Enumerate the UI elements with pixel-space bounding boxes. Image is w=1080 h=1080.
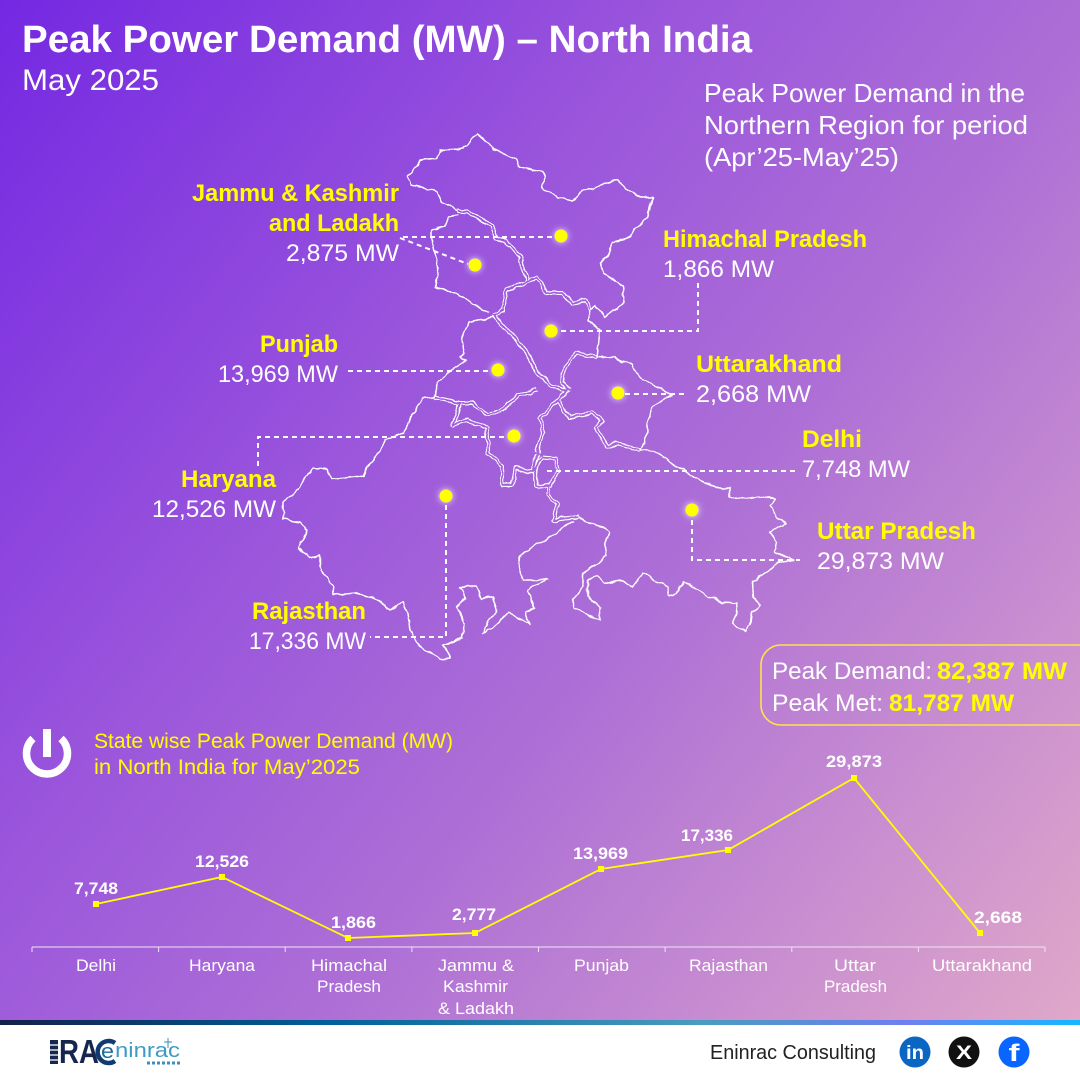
label: Uttar Pradesh bbox=[817, 518, 976, 575]
callout: peak demand and peak met bbox=[761, 645, 1080, 725]
chart category labels: Kashmir bbox=[443, 977, 508, 996]
label: Himachal Pradesh: Himachal Pradesh bbox=[663, 226, 867, 253]
logo: Eninrac bbox=[50, 1033, 180, 1070]
label: Haryana: Haryana bbox=[181, 466, 277, 493]
label: Himachal Pradesh: 1,866 MW bbox=[663, 256, 774, 283]
title: Peak Power Demand (MW) – North India bbox=[22, 19, 753, 61]
label: Delhi bbox=[802, 426, 910, 483]
chart category labels: & Ladakh bbox=[438, 999, 514, 1018]
label: Punjab: Punjab bbox=[260, 331, 338, 358]
callout: peak demand and peak met: 82,387 MW bbox=[937, 658, 1067, 685]
label: Jammu & Kashmir and Ladakh: and Ladakh bbox=[269, 210, 399, 237]
icon: Facebook bbox=[998, 1036, 1030, 1068]
chart data values: 12,526 bbox=[195, 852, 249, 871]
chart heading bbox=[94, 730, 453, 779]
chart category labels: Uttar bbox=[834, 956, 876, 975]
chart category labels: Punjab bbox=[574, 956, 629, 975]
map marker dots bbox=[440, 230, 698, 516]
label: Rajasthan: Rajasthan bbox=[252, 598, 366, 625]
logo: Eninrac: RA bbox=[59, 1033, 99, 1070]
chart data values: 7,748 bbox=[74, 879, 118, 898]
chart data values: 29,873 bbox=[826, 752, 882, 771]
footer bbox=[0, 1020, 1080, 1080]
logo: Eninrac: e bbox=[101, 1041, 114, 1063]
chart heading: in North India for May’2025 bbox=[94, 756, 360, 779]
text block: map description: Peak Power Demand in the bbox=[704, 78, 1025, 108]
chart category labels: Rajasthan bbox=[689, 956, 768, 975]
label: Uttarakhand bbox=[696, 351, 842, 408]
label: Uttarakhand: 2,668 MW bbox=[696, 381, 811, 408]
chart data values: 1,866 bbox=[331, 913, 376, 932]
chart data values: 2,668 bbox=[974, 908, 1022, 927]
chart markers bbox=[93, 775, 983, 941]
icon: X bbox=[948, 1036, 980, 1068]
icon: power symbol bbox=[26, 729, 68, 774]
label: Rajasthan: 17,336 MW bbox=[249, 628, 366, 655]
label: Delhi: Delhi bbox=[802, 426, 862, 453]
label: Jammu & Kashmir and Ladakh: Jammu & Kashmir bbox=[192, 180, 399, 207]
label: Rajasthan bbox=[249, 598, 366, 655]
label: Delhi: 7,748 MW bbox=[802, 456, 910, 483]
text block: map description bbox=[704, 78, 1028, 172]
chart category labels: Himachal bbox=[311, 956, 387, 975]
text block: map description: Northern Region for period bbox=[704, 110, 1028, 140]
label: Himachal Pradesh bbox=[663, 226, 867, 283]
chart data values: 17,336 bbox=[681, 826, 733, 845]
label: Uttar Pradesh: Uttar Pradesh bbox=[817, 518, 976, 545]
callout: peak demand and peak met: Peak Demand: bbox=[772, 658, 932, 685]
chart heading: State wise Peak Power Demand (MW) bbox=[94, 730, 453, 753]
leader lines bbox=[258, 237, 800, 637]
callout: peak demand and peak met: 81,787 MW bbox=[889, 690, 1014, 717]
chart data values: 2,777 bbox=[452, 905, 496, 924]
callout: peak demand and peak met: Peak Met: bbox=[772, 690, 883, 717]
label: Jammu & Kashmir and Ladakh bbox=[192, 180, 399, 267]
chart data values bbox=[74, 752, 1022, 932]
chart category labels: Haryana bbox=[189, 956, 256, 975]
footer company name: Eninrac Consulting bbox=[710, 1042, 876, 1064]
icon: X: X bbox=[956, 1043, 972, 1064]
subtitle: date: May 2025 bbox=[22, 64, 159, 97]
label: Haryana bbox=[152, 466, 277, 523]
label: Uttar Pradesh: 29,873 MW bbox=[817, 548, 944, 575]
label: Punjab bbox=[218, 331, 338, 388]
label: Haryana: 12,526 MW bbox=[152, 496, 276, 523]
icon: LinkedIn: in bbox=[906, 1043, 924, 1064]
chart category labels bbox=[76, 956, 1032, 1018]
chart data values: 13,969 bbox=[573, 844, 628, 863]
chart category labels: Uttarakhand bbox=[932, 956, 1032, 975]
chart category labels: Delhi bbox=[76, 956, 116, 975]
chart category labels: Pradesh bbox=[824, 977, 887, 996]
logo: Eninrac: ninrac bbox=[115, 1040, 180, 1062]
icon: LinkedIn bbox=[900, 1036, 930, 1068]
text block: map description: (Apr’25-May’25) bbox=[704, 142, 899, 172]
chart category labels: Jammu & bbox=[438, 956, 515, 975]
label: Punjab: 13,969 MW bbox=[218, 361, 338, 388]
label: Jammu & Kashmir and Ladakh: 2,875 MW bbox=[286, 240, 399, 267]
line chart: state wise peak demand bbox=[32, 752, 1045, 1018]
label: Uttarakhand: Uttarakhand bbox=[696, 351, 842, 378]
map: northern region of India bbox=[283, 135, 795, 659]
chart category labels: Pradesh bbox=[317, 977, 381, 996]
icon: Facebook: f bbox=[1008, 1040, 1021, 1067]
